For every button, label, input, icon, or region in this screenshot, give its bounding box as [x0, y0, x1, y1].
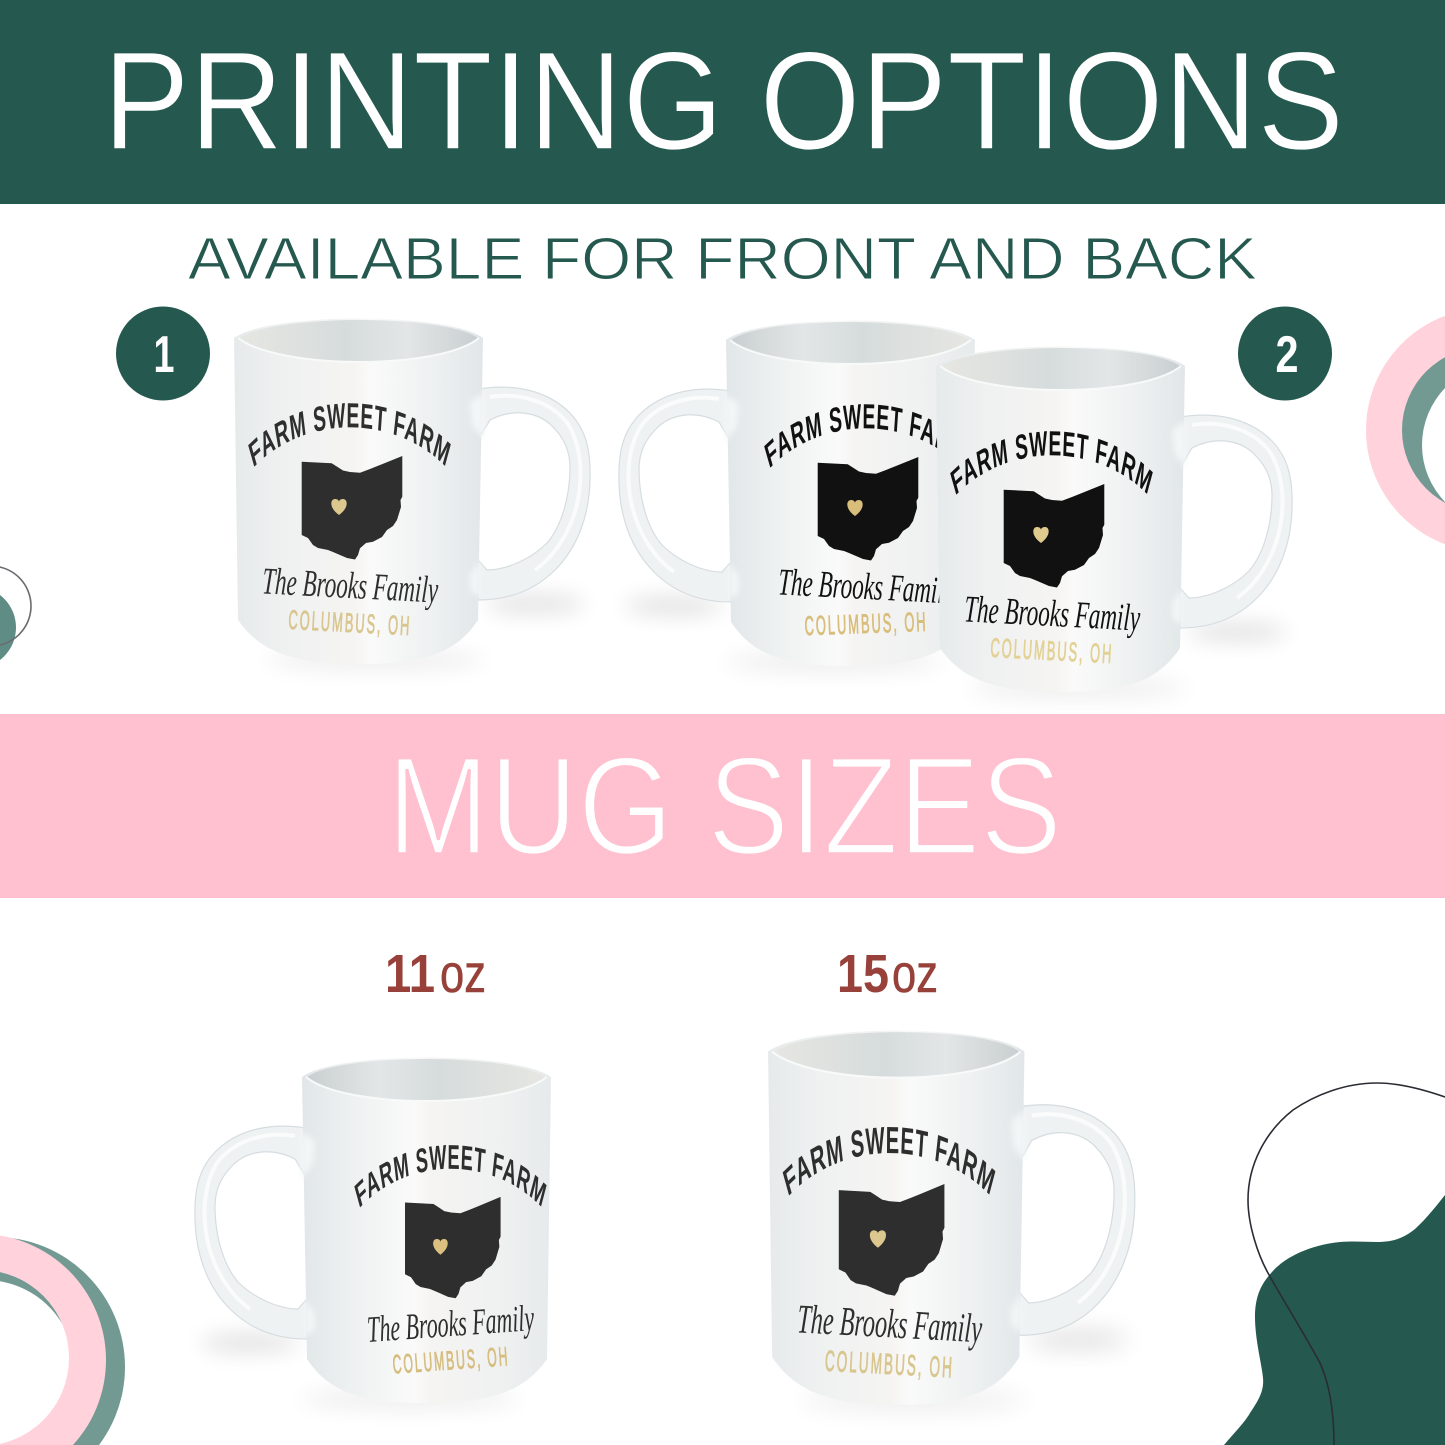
subtitle: AVAILABLE FOR FRONT AND BACK — [188, 226, 1257, 292]
number badge 1 — [116, 306, 210, 400]
label: 11oz: 11 — [385, 944, 435, 1004]
mug 2 design: The Brooks Family — [777, 561, 955, 613]
mug 2 design: FARM SWEET FARM — [764, 404, 938, 468]
mug 1 design: COLUMBUS, OH — [288, 605, 412, 641]
mug 3: front print, front mug — [937, 346, 1293, 698]
number badge 2: 2 — [1276, 326, 1298, 384]
mug 1: front print — [234, 318, 624, 670]
number badge 1: 1 — [154, 326, 174, 384]
mug 2 design — [764, 404, 955, 641]
title: printing options: PRINTING OPTIONS — [103, 22, 1344, 179]
mug 1 design — [248, 403, 451, 641]
mug 5 design: COLUMBUS, OH — [824, 1345, 955, 1385]
mug 3 design: COLUMBUS, OH — [990, 633, 1114, 669]
mug 2: back print, rear mug — [618, 320, 1016, 672]
mug 4 design: The Brooks Family — [366, 1297, 536, 1350]
mug 4: 11oz — [194, 1058, 551, 1409]
mug 1 design: The Brooks Family — [261, 560, 439, 612]
mug 5 design — [782, 1127, 996, 1385]
label: 15oz: oz — [892, 944, 938, 1004]
pink band — [0, 714, 1445, 898]
label: 11oz: oz — [440, 944, 486, 1004]
mug 3 design: The Brooks Family — [963, 588, 1141, 640]
mug 3 design: FARM SWEET FARM — [950, 431, 1153, 495]
decoration: bottom left rings — [0, 1234, 125, 1445]
label: 15oz — [837, 944, 938, 1004]
number badge 2 — [1238, 306, 1332, 400]
header band — [0, 0, 1445, 204]
mug 5: 15oz — [768, 1030, 1136, 1411]
decoration: right rings — [1366, 308, 1445, 552]
label: 11oz — [385, 944, 486, 1004]
mug 3 design — [950, 431, 1153, 669]
mug 2 design: COLUMBUS, OH — [804, 607, 928, 641]
mug 5 design: FARM SWEET FARM — [782, 1127, 996, 1196]
mug 4 design — [354, 1145, 547, 1380]
mug 4 design: COLUMBUS, OH — [392, 1341, 510, 1380]
mug 5 design: The Brooks Family — [796, 1296, 983, 1351]
mug 4 design: FARM SWEET FARM — [354, 1145, 547, 1208]
mug 1 design: FARM SWEET FARM — [248, 403, 451, 467]
heading: mug sizes: MUG SIZES — [387, 727, 1062, 884]
decoration: bottom right blob — [1224, 1083, 1445, 1445]
decoration: left small circles — [0, 566, 31, 668]
label: 15oz: 15 — [837, 944, 889, 1004]
